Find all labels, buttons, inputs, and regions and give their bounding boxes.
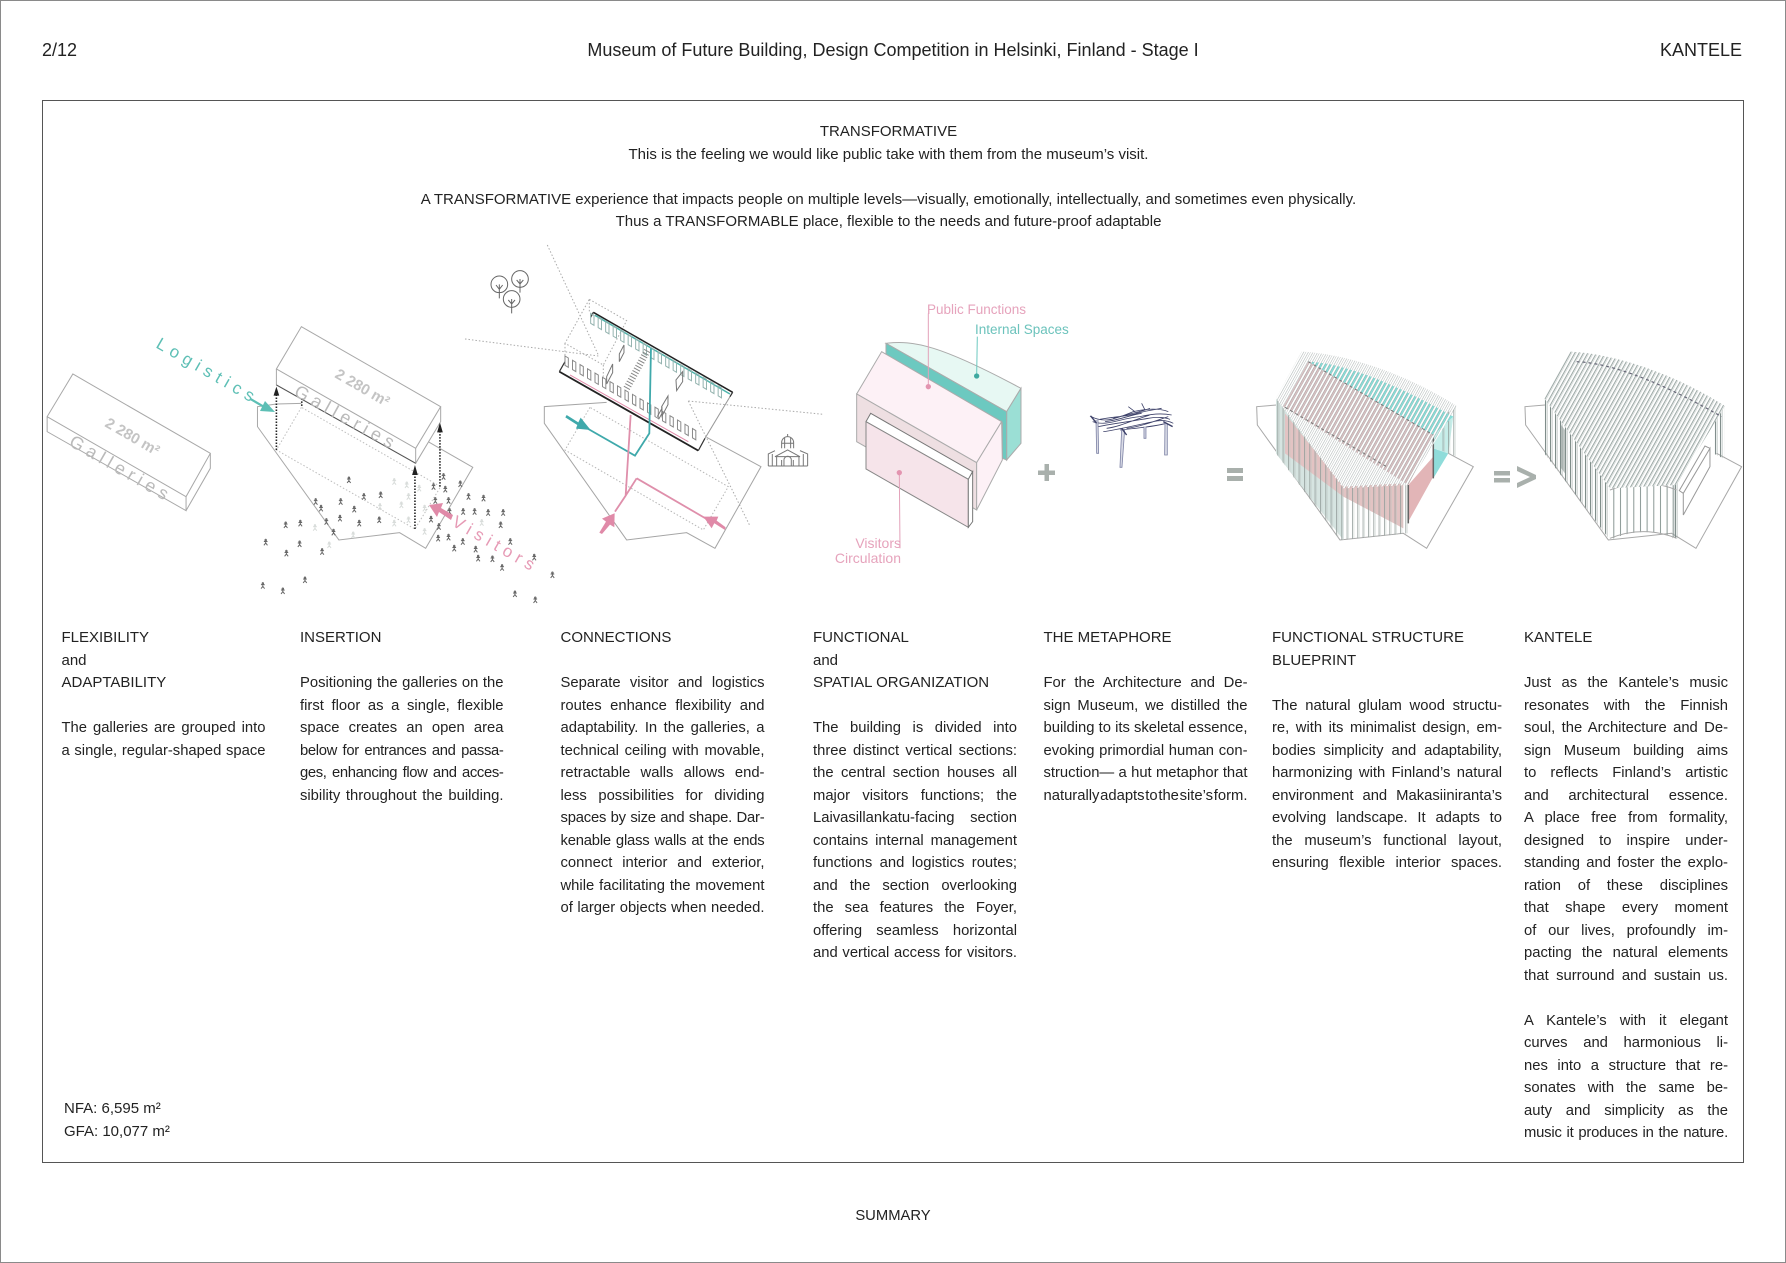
intro: transformative experience sentence: A TRANSFORMATIVE experience that impacts people on multiple levels—visually, emotionally, intellectually, and sometimes even physically. [421,191,1356,208]
site outline [544,402,761,548]
lift arrows [274,387,443,529]
heading: flexibility: and [62,652,87,668]
equals sign [1227,468,1243,481]
text: structure: harmonizing with Finland’s natural [1272,765,1502,781]
area figures: GFA: 10,077 m² [64,1122,170,1140]
text: kantele first paragraph: standing and foster the explo- [1524,855,1728,871]
column: functional and spatial organization [813,629,1017,961]
project name: KANTELE [1660,40,1742,60]
text: metaphor: For the Architecture and De- [1044,675,1248,691]
column: functional structure blueprint [1272,629,1502,871]
text: insertion: ges, enhancing flow and acces- [300,765,504,781]
text: functional: contains internal management [813,832,1017,848]
text: metaphor: evoking primordial human con- [1044,742,1248,758]
crowd of people [261,474,554,603]
diagram: kantele building [1525,352,1742,548]
text: insertion: first floor as a single, flexible [300,698,504,714]
text: structure: evolving landscape. It adapts to [1272,810,1502,826]
diagram: flexibility box: Galleries [66,431,176,506]
text: connections: routes enhance flexibility and [560,698,764,714]
text: insertion: Positioning the galleries on the [300,675,504,691]
arrow: equals chevron [1494,466,1536,488]
internal spaces volume [886,342,1021,412]
gallery plate [559,312,733,451]
icon: trees [491,271,528,313]
text: kantele second paragraph: auty and simplicity as the [1524,1102,1728,1118]
gallery area: 2 280 m² [332,366,393,410]
sight lines [465,245,823,526]
heading: structure: FUNCTIONAL STRUCTURE [1272,629,1464,646]
coloured wall volumes [1276,398,1453,540]
heading: functional: FUNCTIONAL [813,629,909,646]
text: structure [1272,698,1502,871]
text: connections: connect interior and exterior, [560,855,764,871]
text: connections [560,675,764,916]
text: kantele first paragraph: A place free from formality, [1524,810,1728,826]
heading: structure [1272,629,1464,668]
text: kantele first paragraph: designed to inspire under- [1524,832,1728,848]
column: the metaphor [1044,629,1248,804]
text: functional: and vertical access for visitors. [813,945,1017,961]
text: structure: The natural glulam wood structu- [1272,698,1502,714]
plus sign [1038,464,1055,481]
text: connections: of larger objects when needed. [560,900,764,916]
heading: flexibility: ADAPTABILITY [62,674,166,691]
heading: flexibility: FLEXIBILITY [62,629,149,646]
text: functional: the sea features the Foyer, [813,900,1017,916]
text: metaphor: building to its skeletal essence, [1044,720,1248,736]
text: connections: spaces by size and shape. Dar- [560,810,764,826]
text: structure: ensuring flexible interior spaces. [1272,855,1502,871]
text: kantele second paragraph [1524,1012,1728,1141]
area figures: NFA: 6,595 m² [64,1100,161,1117]
logistics arrow [250,398,275,412]
heading: functional: and [813,652,838,668]
column: connections [560,629,764,916]
visitors label: Visitors [449,512,543,577]
visitors circulation volume [866,413,973,479]
text: kantele first paragraph: of our lives, profoundly im- [1524,922,1728,938]
text: functional: and the section overlooking [813,878,1017,894]
heading: connections: CONNECTIONS [560,629,671,646]
text: functional: The building is divided into [813,720,1017,736]
text: insertion: below for entrances and passa- [300,742,504,758]
public functions volume [857,352,1002,463]
text: kantele first paragraph: sign Museum building aims [1524,742,1728,758]
text: kantele first paragraph: that shape every moment [1524,900,1728,916]
label: internal spaces: Internal Spaces [975,322,1069,337]
text: flexibility: a single, regular-shaped space [62,742,266,758]
icon: domed church [768,434,808,466]
label: visitors circulation: Visitors [855,535,901,551]
text: insertion: space creates an open area [300,720,504,736]
label: public functions: Public Functions [927,302,1026,317]
text: connections: adaptability. In the galleries, a [560,720,764,736]
text: metaphor [1044,675,1248,804]
ground floor dotted outline [565,407,728,530]
text: structure: re, with its minimalist design, em- [1272,720,1502,736]
text: metaphor: naturally adapts to the site’s form. [1044,788,1248,804]
text: kantele first paragraph: that surround and sustain us. [1524,968,1728,984]
heading: functional [813,629,989,691]
diagram: flexibility box: 2 280 m² [102,415,163,459]
service box [1679,446,1710,515]
text: insertion [300,675,504,804]
facade columns [1544,398,1610,540]
diagram: functional organization [835,302,1069,566]
intro: transformative heading: TRANSFORMATIVE [820,123,957,140]
heading: structure: BLUEPRINT [1272,652,1356,668]
text: kantele second paragraph: A Kantele’s with it elegant [1524,1012,1728,1028]
text: flexibility: The galleries are grouped into [62,720,266,736]
vertical columns [1276,398,1408,540]
text: functional: offering seamless horizontal [813,922,1017,938]
text: kantele first paragraph: ration of these disciplines [1524,878,1728,894]
heading: flexibility [62,629,166,691]
column: insertion [300,629,504,804]
text: connections: technical ceiling with movable, [560,742,764,758]
text: flexibility [62,720,266,758]
text: kantele first paragraph: resonates with the Finnish [1524,698,1728,714]
leader lines and dots [899,313,928,548]
text: kantele second paragraph: curves and harmonious li- [1524,1035,1728,1051]
text: functional: Laivasillankatu-facing section [813,810,1017,826]
visitors route [599,415,726,534]
text: functional [813,720,1017,961]
heading: kantele: KANTELE [1524,629,1592,646]
dense roof slats [1544,352,1725,488]
text: structure: the museum’s functional layout, [1272,832,1502,848]
intro: feeling sentence: This is the feeling we would like public take with them from the museum’s visit. [629,146,1148,163]
text: connections: Separate visitor and logistics [560,675,764,691]
text: functional: three distinct vertical sections: [813,742,1017,758]
coloured roof volumes [1283,362,1453,485]
visitors arrow [429,503,453,520]
logistics label: Logistics [153,334,263,408]
site outline [1257,405,1473,548]
intro: transformable place sentence: Thus a TRANSFORMABLE place, flexible to the needs and future-proof adaptable [616,213,1161,230]
page number: 2/12 [42,40,77,60]
diagram: flexibility box [47,374,210,511]
icon: primordial hut [1090,403,1173,467]
text: kantele second paragraph: nes into a structure that re- [1524,1058,1728,1074]
site outline [1525,405,1742,548]
text: connections: retractable walls allows end- [560,765,764,781]
diagram: functional structure blueprint [1257,352,1473,548]
column: flexibility and adaptability [62,629,266,758]
heading: metaphor: THE METAPHORE [1044,629,1172,646]
text: functional: major visitors functions; the [813,788,1017,804]
heading: functional: SPATIAL ORGANIZATION [813,674,989,691]
area figures [64,1100,170,1140]
text: structure: environment and Makasiiniranta’s [1272,788,1502,804]
text: kantele first paragraph: to reflects Finland’s artistic [1524,765,1728,781]
text: kantele first paragraph: and architectural essence. [1524,788,1728,804]
logistics route [565,348,651,456]
diagram: connections [465,245,823,548]
roof slats [1276,352,1457,488]
gallery label: Galleries [291,381,402,455]
text: kantele first paragraph [1524,675,1728,984]
text: metaphor: sign Museum, we distilled the [1044,698,1248,714]
footer: summary: SUMMARY [855,1208,931,1224]
text: insertion: sibility throughout the building. [300,788,504,804]
text: kantele second paragraph: sonates with the same be- [1524,1080,1728,1096]
site outline and raised gallery box [257,327,473,548]
label: visitors circulation: Circulation [835,550,901,566]
text: connections: kenable glass walls at the ends [560,832,764,848]
heading: insertion: INSERTION [300,629,381,646]
page title: Museum of Future Building, Design Competition in Helsinki, Finland - Stage I [587,40,1199,60]
text: functional: functions and logistics routes; [813,855,1017,871]
text: metaphor: struction— a hut metaphor that [1044,765,1248,781]
text: functional: the central section houses all [813,765,1017,781]
text: connections: less possibilities for dividing [560,788,764,804]
text: kantele first paragraph: pacting the natural elements [1524,945,1728,961]
column: kantele [1524,629,1728,1141]
text: connections: while facilitating the movement [560,878,764,894]
text: kantele second paragraph: music it produces in the nature. [1524,1125,1728,1141]
text: structure: bodies simplicity and adaptability, [1272,742,1502,758]
diagram: insertion [153,327,554,603]
text: kantele first paragraph: Just as the Kantele’s music [1524,675,1728,691]
text: kantele first paragraph: soul, the Architecture and De- [1524,720,1728,736]
